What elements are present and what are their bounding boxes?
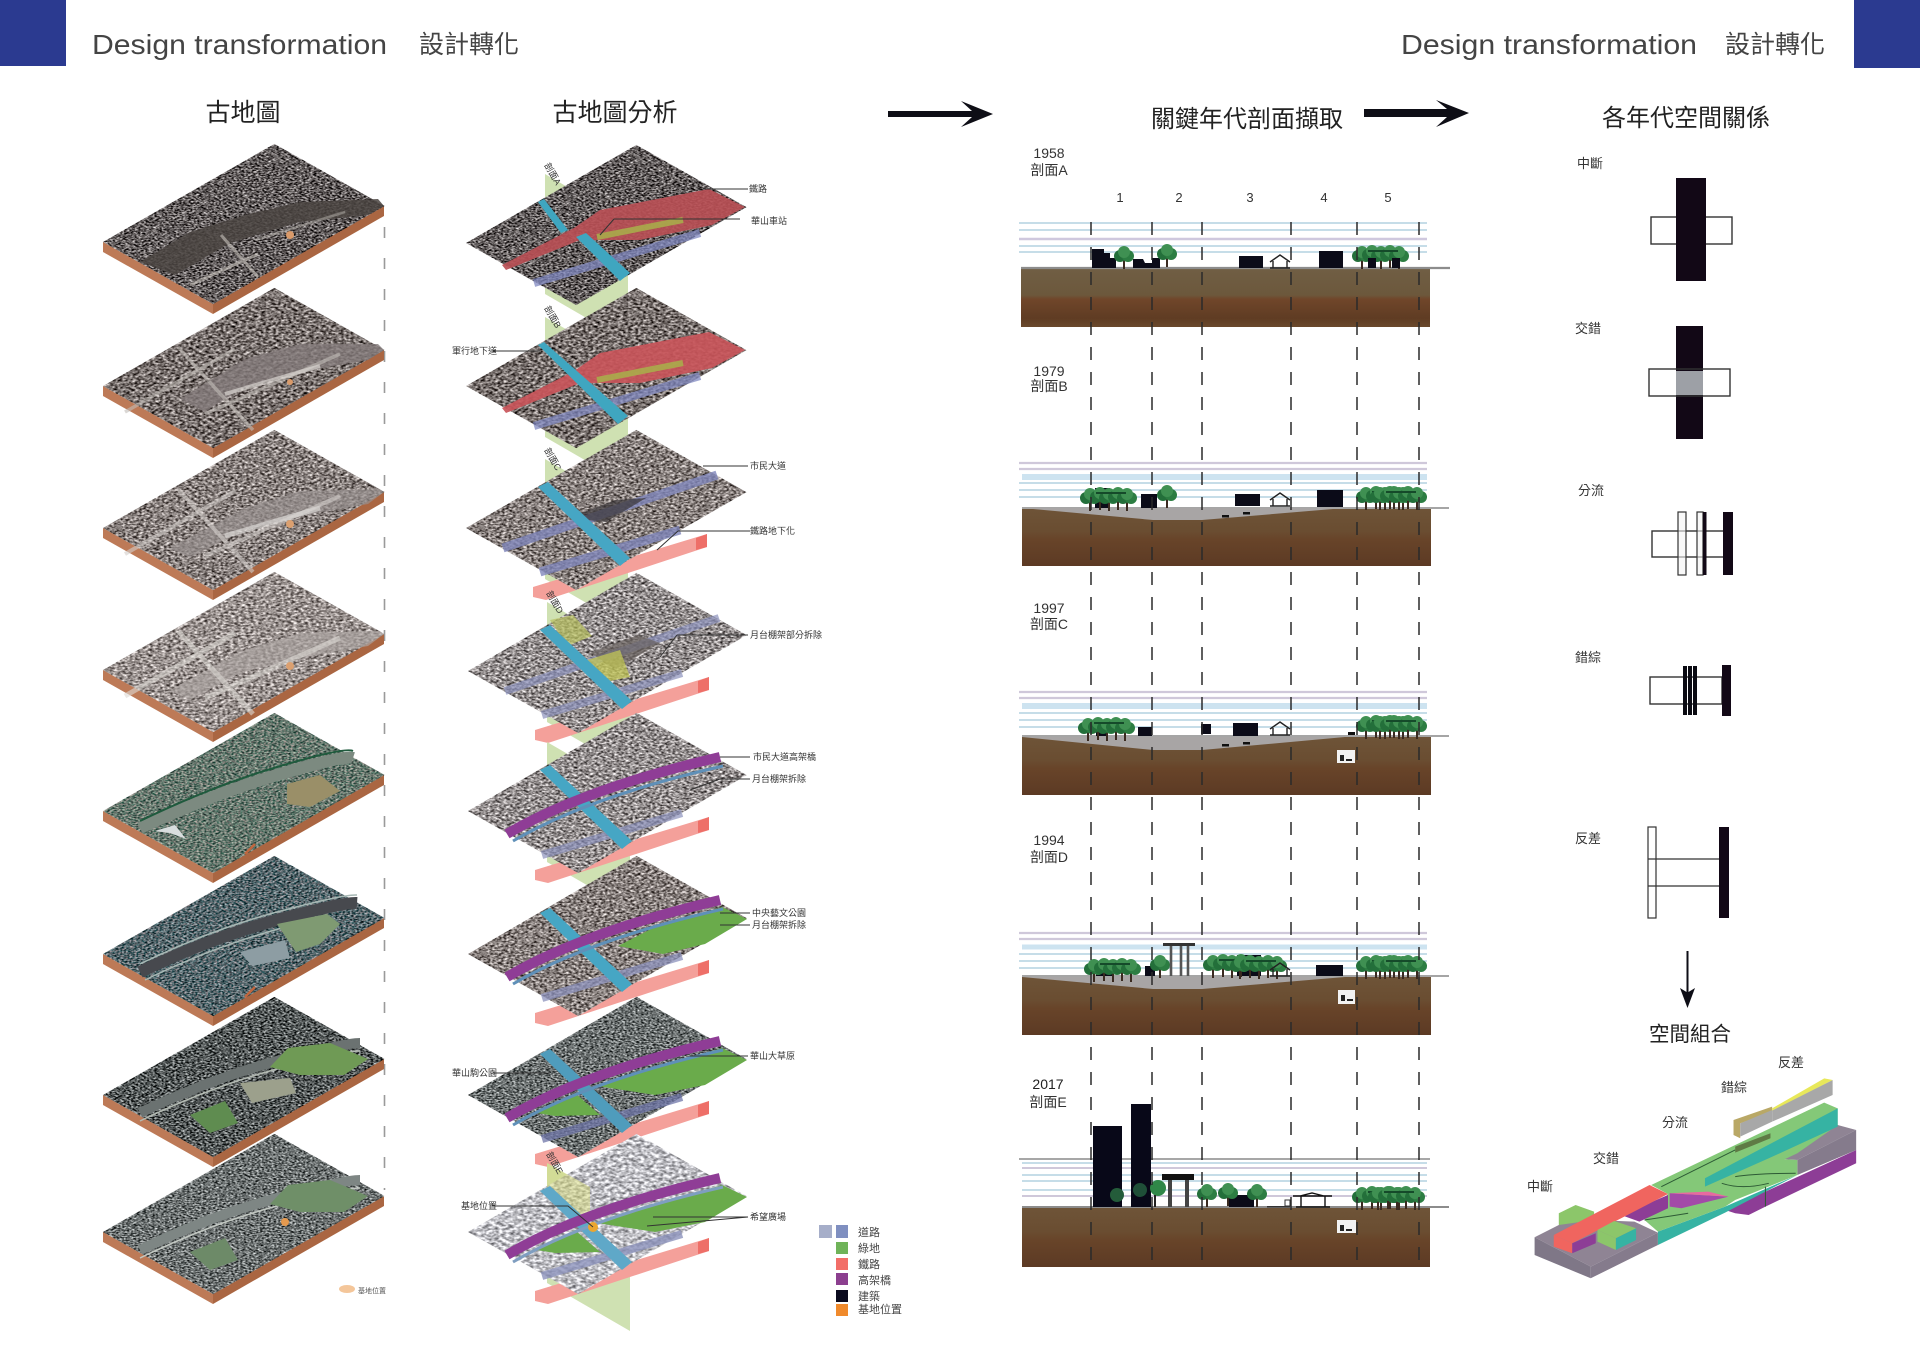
heading: spatial relations by era: 各年代空間關係: [1602, 105, 1770, 132]
panel: historic map stack: [103, 144, 386, 1304]
section E 2017: [1019, 1076, 1449, 1267]
legend: 高架橋: [858, 1273, 891, 1287]
map tile 1: [103, 144, 384, 314]
section D 1994: 剖面D: [1030, 849, 1068, 865]
analysis tile H: 剖面E: [544, 1150, 566, 1176]
relation: contrast: 反差: [1575, 831, 1601, 846]
legend: 鐵路: [858, 1257, 880, 1271]
relation: intertwining: [1575, 650, 1731, 716]
section A 1958: [1019, 145, 1450, 327]
callouts: analysis labels: [492, 189, 750, 1227]
callout text: labels: 市民大道高架橋: [753, 751, 816, 762]
section B 1979: 剖面B: [1030, 378, 1068, 394]
header: right title: [1401, 29, 1825, 60]
analysis tile B: 剖面B: [542, 304, 564, 330]
heading: historic maps: 古地圖: [205, 99, 281, 127]
panel: spatial relations: [1527, 156, 1856, 1278]
header: left title: 設計轉化: [419, 31, 519, 59]
relation: interlacing: [1575, 321, 1730, 439]
header: left title: Design transformation: [92, 29, 387, 60]
header: right title: 設計轉化: [1725, 31, 1825, 59]
analysis tile A: 剖面A: [542, 160, 564, 187]
panel: key era sections: [1019, 145, 1450, 1268]
section C 1997: 1997: [1033, 600, 1065, 616]
combination labels: 分流: [1662, 1115, 1688, 1130]
map tile 3: [103, 430, 384, 600]
callout text: labels: 華山車站: [751, 215, 787, 226]
section numbers: 1: [1116, 190, 1124, 205]
legend: 基地位置: [858, 1302, 902, 1316]
arrow: analysis to sections: [888, 101, 993, 127]
axonometric combination model: [1535, 1078, 1856, 1278]
map tile 7: [103, 997, 384, 1167]
map tile 5: [103, 713, 384, 883]
analysis tile C: 剖面C: [542, 446, 564, 473]
callout text: labels: 基地位置: [461, 1200, 497, 1211]
analysis tile E: [468, 713, 746, 910]
section numbers: 5: [1384, 190, 1392, 205]
callout text: labels: 希望廣場: [750, 1211, 786, 1222]
section E 2017: 剖面E: [1029, 1094, 1067, 1110]
section numbers: 2: [1175, 190, 1183, 205]
heading: spatial combination: 空間組合: [1649, 1023, 1731, 1046]
combination labels: 錯綜: [1721, 1080, 1747, 1095]
combination labels: 中斷: [1527, 1179, 1553, 1194]
section numbers: 4: [1320, 190, 1328, 205]
analysis tile G: [468, 997, 747, 1167]
map tile 4: [103, 572, 384, 742]
legend: 綠地: [858, 1241, 880, 1255]
heading: historic map analysis: 古地圖分析: [552, 99, 678, 127]
map tile 6: [103, 856, 384, 1026]
site position key: 基地位置: [358, 1286, 386, 1295]
section B 1979: 1979: [1033, 363, 1065, 379]
analysis tile F: [468, 856, 747, 1026]
dashed guide line: [384, 227, 386, 1190]
legend: [819, 1225, 902, 1316]
section D 1994: 1994: [1033, 832, 1065, 848]
relation: interlacing: 交錯: [1575, 321, 1601, 336]
section C 1997: [1019, 600, 1449, 795]
callout text: labels: 華山大草原: [750, 1050, 795, 1061]
site position key: [339, 1285, 386, 1295]
header: right title: Design transformation: [1401, 29, 1697, 60]
header: left title: [92, 29, 519, 60]
panel: historic map analysis stack: [452, 145, 902, 1331]
callout text: labels: 鐵路地下化: [750, 525, 795, 536]
section numbers: 3: [1246, 190, 1254, 205]
callout text: labels: 月台棚架部分拆除: [750, 629, 822, 640]
combination labels: 反差: [1778, 1055, 1804, 1070]
relation: diversion: 分流: [1578, 483, 1604, 498]
section A 1958: 1958: [1033, 145, 1065, 161]
heading: key era section extraction: 關鍵年代剖面擷取: [1151, 106, 1343, 133]
header: left blue tab: [0, 0, 66, 66]
section E 2017: 2017: [1032, 1076, 1064, 1092]
analysis tile D: 剖面D: [544, 588, 566, 616]
callout text: labels: [452, 183, 822, 1222]
callout text: labels: 月台棚架拆除: [752, 773, 806, 784]
combination labels: 交錯: [1593, 1151, 1619, 1166]
header: right blue tab: [1854, 0, 1920, 68]
callout text: labels: 市民大道: [750, 460, 786, 471]
relation: contrast: [1575, 827, 1729, 918]
analysis tile D: [468, 573, 746, 770]
relation: intertwining: 錯綜: [1575, 650, 1601, 665]
section A 1958: 剖面A: [1030, 162, 1068, 178]
relation: interruption: [1577, 156, 1732, 281]
arrow: sections to relations: [1364, 100, 1469, 127]
section C 1997: 剖面C: [1030, 616, 1068, 632]
dashed section cut lines: [1091, 222, 1419, 1268]
callout text: labels: 軍行地下道: [452, 345, 497, 356]
analysis tile H: [468, 1134, 747, 1331]
analysis tile B: [466, 288, 746, 485]
legend: 道路: [858, 1225, 880, 1239]
map tile 2: [103, 288, 384, 458]
analysis tile C: [466, 430, 746, 627]
map tile 8: [103, 1134, 384, 1304]
callout text: labels: 中央藝文公園: [752, 907, 806, 918]
section numbers: [1116, 190, 1392, 205]
arrow: relations to combination: [1680, 951, 1695, 1008]
analysis tile A: [466, 145, 746, 342]
section B 1979: [1019, 363, 1449, 566]
legend: 建築: [858, 1289, 880, 1303]
callout text: labels: 月台棚架拆除: [752, 919, 806, 930]
callout text: labels: 華山駒公園: [452, 1067, 497, 1078]
callout text: labels: 鐵路: [749, 183, 767, 194]
relation: diversion: [1578, 483, 1733, 575]
section D 1994: [1019, 832, 1449, 1035]
relation: interruption: 中斷: [1577, 156, 1603, 171]
combination labels: [1527, 1055, 1804, 1194]
